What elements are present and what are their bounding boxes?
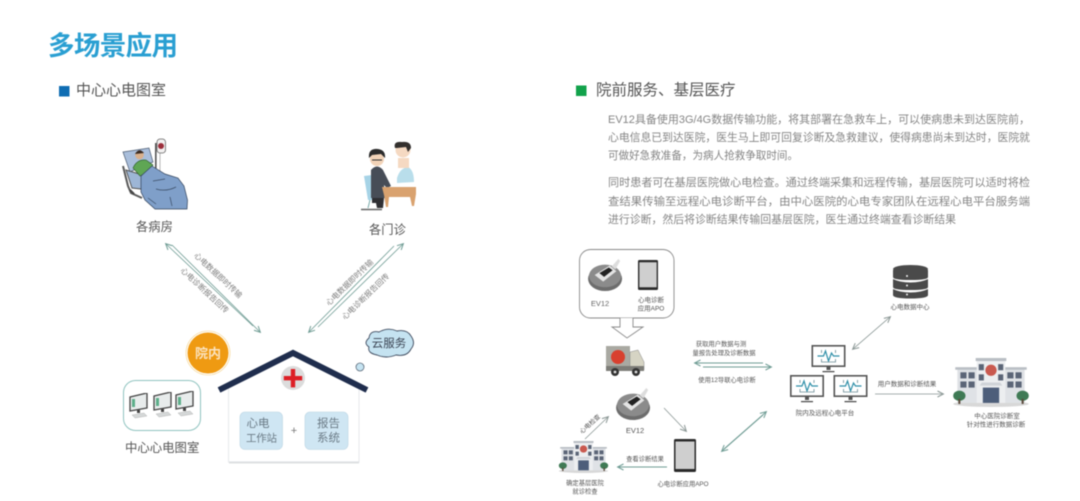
house shadow xyxy=(229,462,359,464)
text block: description: 可做好急救准备，为病人抢救争取时间。 xyxy=(608,148,798,162)
label: central hospital xyxy=(967,411,1026,428)
icon: tablet, lower xyxy=(674,439,696,472)
house body xyxy=(228,352,359,462)
icon: ambulance xyxy=(606,346,644,376)
icon: tablet xyxy=(638,260,658,290)
text block: description: 同时患者可在基层医院做心电检查。通过终端采集和远程传输，基层医院可以适时将检 xyxy=(608,175,1030,189)
roof xyxy=(219,353,367,390)
icon: central ECG room computers xyxy=(124,380,200,430)
title: 多场景应用 xyxy=(48,31,178,61)
arrow label: view results: 查看诊断结果 xyxy=(626,454,665,463)
arrow label: ECG exam: 心电检查 xyxy=(577,411,603,435)
label: ECG diagnosis app, lower: 心电诊断应用APO xyxy=(657,479,709,488)
arrow: equipment down to ambulance xyxy=(612,318,643,338)
label: ambulance data exchange: 获取用户数据与测 xyxy=(696,339,746,348)
badge: in-hospital xyxy=(186,331,230,375)
text block: description: 心电信息已到达医院，医生马上即可回复诊断及急救建议，使得病患尚未到达时，医院就 xyxy=(608,130,1030,144)
heading: central ECG room: 中心心电图室 xyxy=(76,82,166,99)
label: central hospital: 中心医院诊断室 xyxy=(974,411,1020,420)
label: local hospital xyxy=(566,478,605,496)
arrows: tablet and platform exchange xyxy=(722,412,766,451)
icon: central hospital xyxy=(953,358,1029,407)
arrow: clinics to central house xyxy=(309,244,403,332)
label: remote ECG platform: 院内及远程心电平台 xyxy=(796,408,854,417)
label: wards: 各病房 xyxy=(136,219,173,234)
icon: local hospital xyxy=(559,441,608,473)
arrow: tablet to local hospital xyxy=(618,466,667,468)
icon: patient in bed xyxy=(123,139,188,209)
arrow label: user data and results: 用户数据和诊断结果 xyxy=(878,379,937,388)
label: ECG diagnosis app xyxy=(638,295,664,312)
label: central ECG room: 中心心电图室 xyxy=(125,440,199,455)
label: local hospital: 就诊检查 xyxy=(572,486,598,496)
icon: doctor and patient xyxy=(361,142,416,210)
label: EV12, lower: EV12 xyxy=(626,426,644,435)
label: central hospital: 针对性进行数据诊断 xyxy=(967,420,1026,428)
label: data center: 心电数据中心 xyxy=(890,302,930,311)
box: report system xyxy=(305,412,348,450)
label: ECG diagnosis app: 应用APO xyxy=(638,304,664,312)
callout: cloud service xyxy=(356,329,414,371)
heading: pre-hospital and primary care: 院前服务、基层医疗 xyxy=(596,80,736,99)
arrow: hospital to EV12 xyxy=(585,417,608,439)
arrow: EV12 to tablet xyxy=(664,408,686,431)
label: ambulance data exchange: 量报告处理及诊断数据 xyxy=(693,348,756,357)
text block: description: 查结果传输至远程心电诊断平台，由中心医院的心电专家团队在远程心电平台服务端 xyxy=(608,194,1030,208)
arrows: ambulance and platform exchange xyxy=(695,363,771,367)
label: 12-lead diagnosis: 使用12导联心电诊断 xyxy=(698,375,756,384)
arrow: platform and data center xyxy=(853,317,890,349)
arrow label: clinic data upload: 心电数据即时传输 xyxy=(323,257,375,307)
panel: central ECG room xyxy=(59,82,416,464)
callout: cloud service: 云服务 xyxy=(372,336,407,350)
icon: data center xyxy=(893,265,928,298)
box: ECG workstation: 心电 xyxy=(246,417,270,430)
box: report system: 系统 xyxy=(317,432,340,444)
icon: EV12 device, lower xyxy=(616,388,650,420)
illustration: hospital house xyxy=(219,352,367,464)
text block: description xyxy=(608,112,1030,226)
label: local hospital: 确定基层医院 xyxy=(566,478,605,487)
label: EV12: EV12 xyxy=(591,299,609,308)
arrow label: ward report return: 心电诊断报告回传 xyxy=(179,265,231,315)
badge: in-hospital: 院内 xyxy=(195,346,221,361)
arrow label: clinic report return: 心电诊断报告回传 xyxy=(339,271,391,321)
icon: remote ECG platform monitors xyxy=(791,346,867,402)
label: outpatient clinics: 各门诊 xyxy=(369,222,407,237)
plus sign: + xyxy=(291,425,297,437)
text block: description: 进行诊断，然后将诊断结果传输回基层医院，医生通过终端查看诊断结果 xyxy=(608,212,956,226)
arrow: platform to central hospital xyxy=(875,393,943,395)
box: ECG workstation xyxy=(240,412,282,450)
text block: description: EV12具备使用3G/4G数据传输功能，将其部署在急救车上，可以使病患未到达医院前， xyxy=(608,112,1030,126)
icon: red cross xyxy=(281,366,305,390)
arrow label: ward data upload: 心电数据即时传输 xyxy=(192,250,245,300)
box: report system: 报告 xyxy=(317,416,340,430)
panel: pre-hospital and primary care xyxy=(559,80,1030,496)
icon: EV12 device xyxy=(588,259,622,291)
label: ambulance data exchange xyxy=(693,339,756,357)
panel: equipment box xyxy=(580,250,674,318)
label: ECG diagnosis app: 心电诊断 xyxy=(638,295,664,304)
arrow: wards to central house xyxy=(166,244,260,332)
box: ECG workstation: 工作站 xyxy=(246,432,278,444)
